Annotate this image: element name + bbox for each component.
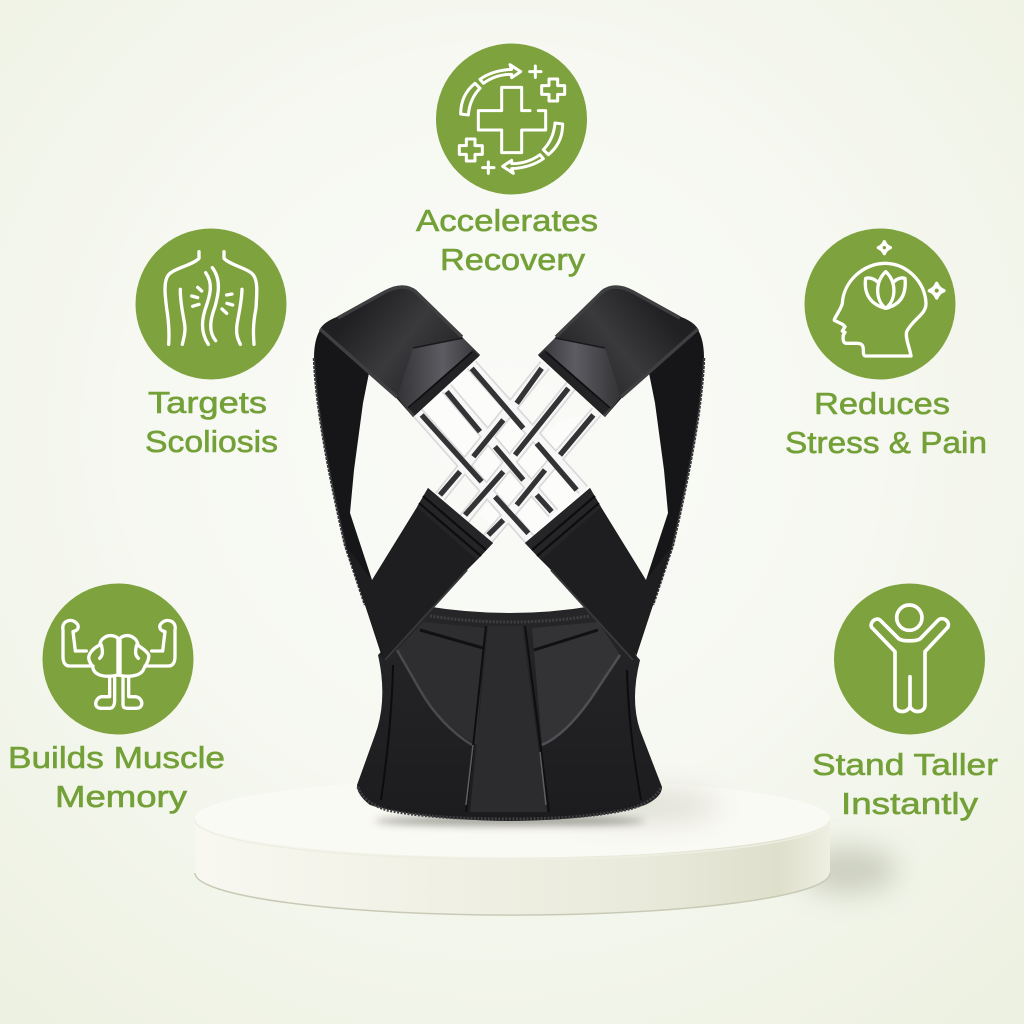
benefit: targets scoliosis [136,228,286,459]
elastic lattice [413,365,597,543]
product: posture brace [314,287,704,821]
label: reduces stress and pain: Stress & Pain [785,425,987,460]
left straps [314,287,493,662]
right straps [525,287,704,662]
label: accelerates recovery [416,203,598,277]
benefit: reduces stress and pain [785,228,987,460]
label: reduces stress and pain: Reduces [814,386,950,421]
benefit: builds muscle memory [8,584,225,814]
label: builds muscle memory: Memory [55,779,188,814]
label: stand taller instantly: Stand Taller [812,747,998,782]
label: builds muscle memory: Builds Muscle [8,740,225,775]
benefit: stand taller instantly [812,584,998,821]
platform [195,778,898,915]
right pocket panel [532,622,620,745]
centre flap [470,626,547,812]
label: stand taller instantly [812,747,998,821]
icon: head with lotus [834,242,944,356]
waist belt [357,606,662,821]
label: reduces stress and pain [785,386,987,460]
label: targets scoliosis: Scoliosis [145,424,278,459]
left pocket panel [397,622,485,745]
icon: flexing brain [63,620,175,708]
label: stand taller instantly: Instantly [841,786,979,821]
icon: standing person with raised arms [871,605,948,712]
icon: back with curved spine [165,252,257,344]
label: targets scoliosis: Targets [148,385,267,420]
label: builds muscle memory [8,740,225,814]
label: accelerates recovery: Recovery [440,242,586,277]
label: targets scoliosis [145,385,278,459]
label: accelerates recovery: Accelerates [416,203,598,238]
benefit: accelerates recovery [416,44,598,277]
icon: medical cross with arrows [459,65,565,173]
